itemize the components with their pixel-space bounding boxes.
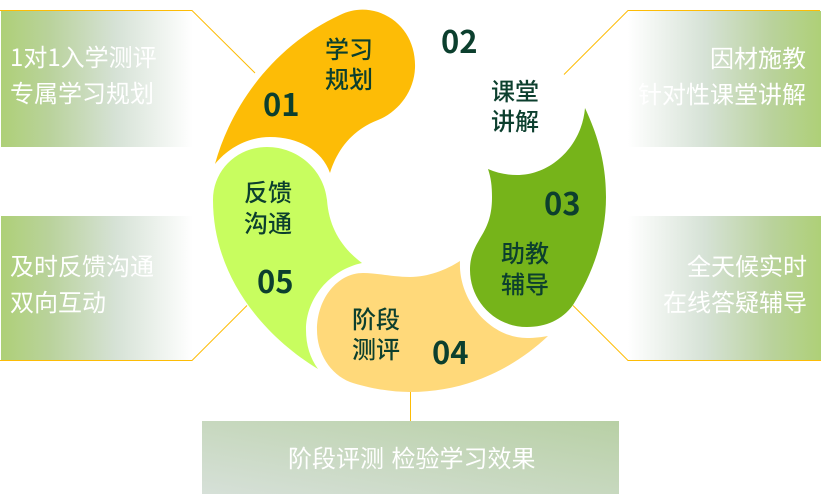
panel: 03 description: 在线答疑辅导 (663, 283, 807, 318)
panel: 03 description (573, 216, 821, 360)
petal 04: yellow (317, 261, 548, 392)
petal 01: orange: 学习 (325, 37, 373, 64)
petal 03: green: 辅导 (501, 272, 549, 299)
petal 05: lime: 05 (257, 257, 294, 302)
panel: 02 description (564, 10, 821, 147)
petal 01: orange (215, 10, 415, 173)
petal 02: white with label: 讲解 (491, 109, 539, 136)
panel: 05 description: 双向互动 (10, 283, 106, 318)
panel: 02 description: 针对性课堂讲解 (638, 75, 806, 110)
petal 01: orange: 01 (263, 80, 300, 125)
panel: 05 description: 及时反馈沟通 (10, 247, 154, 282)
panel: 04 description: 检验学习效果 (392, 439, 536, 474)
petal 04: yellow: 阶段 (352, 307, 400, 334)
petal 02: white with label: 课堂 (491, 79, 539, 106)
petal 05: lime: 沟通 (244, 211, 292, 238)
panel: 02 description: 因材施教 (710, 39, 806, 74)
panel: 01 description: 1对1入学测评 (10, 38, 157, 73)
petal 03: green: 03 (544, 179, 581, 224)
panel: 03 description: 全天候实时 (687, 247, 807, 282)
panel: 05 description (0, 216, 247, 360)
petal 01: orange: 规划 (325, 67, 373, 94)
panel: 04 description (202, 390, 619, 494)
panel: 01 description: 专属学习规划 (10, 74, 154, 109)
petal 04: yellow: 测评 (352, 337, 400, 364)
petal 05: lime: 反馈 (244, 180, 292, 207)
petal 03: green (470, 108, 606, 327)
panel: 01 description (0, 10, 255, 147)
panel: 04 description: 阶段评测 (288, 439, 384, 474)
petal 04: yellow: 04 (432, 328, 469, 373)
petal 02: white with label: 02 (441, 17, 478, 62)
petal 05: lime (213, 147, 362, 369)
petal 02: white with label (441, 17, 539, 136)
petal 03: green: 助教 (501, 241, 549, 268)
